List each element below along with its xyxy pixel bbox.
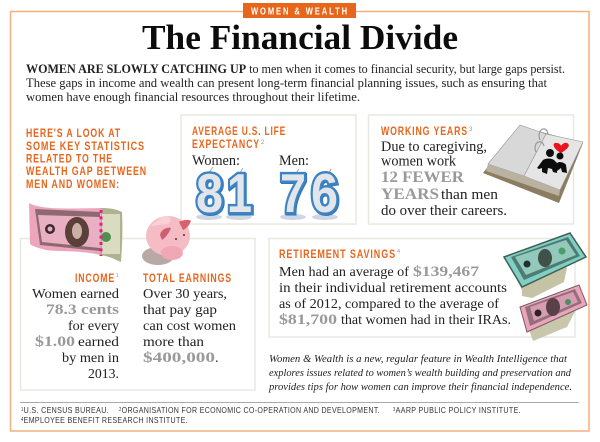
feature note: provides tips for how women can improve their financial independence. [268,381,572,393]
footnotes [20,402,579,425]
retirement text: $139,467 [413,264,480,280]
icon: stacks of green and pink money [504,233,587,341]
candles: 81 [196,162,252,224]
total earnings text: . [215,351,218,366]
total earnings column [143,271,236,366]
life expectancy heading: EXPECTANCY [192,137,260,151]
panel: working years [368,115,574,224]
candles: 81: 1 [227,162,252,224]
working years text: do over their careers. [381,203,507,219]
footnotes: 1 [21,407,24,413]
income text: $1.00 [35,334,75,350]
heart [554,143,569,153]
panel: income and total earnings [20,238,255,390]
intro paragraph: women have enough financial resources throughout their lifetime. [26,90,360,104]
income text [32,287,119,382]
section tag [243,3,356,18]
panel: life expectancy [181,115,356,224]
total earnings heading: TOTAL EARNINGS [143,271,232,285]
left intro heading [26,126,147,191]
footnotes: EMPLOYEE BENEFIT RESEARCH INSTITUTE. [24,415,188,425]
life expectancy heading: 2 [261,140,265,146]
candles: 76: 7 [280,162,306,224]
left intro heading: MEN AND WOMEN: [26,177,120,191]
income text: earned [78,335,119,350]
feature note: explores issues related to women’s wealth building and preservation and [269,367,571,379]
intro paragraph: WOMEN ARE SLOWLY CATCHING UP to men when it comes to financial security, but large gaps persist. [26,62,565,76]
income heading: INCOME [75,271,115,285]
intro paragraph [26,62,565,104]
left intro heading: HERE'S A LOOK AT [26,126,121,140]
candles: 81: 8 [196,162,223,224]
feature note: Women & Wealth is a new, regular feature in Wealth Intelligence that [269,353,568,365]
label: women: Women: [192,153,240,169]
label: men: Men: [279,153,309,169]
working years text: YEARS [381,186,439,203]
income column: 1 [116,273,119,279]
income text: 2013. [88,367,119,382]
total earnings text: can cost women [143,319,236,334]
working years text: than men [441,187,499,203]
section tag: WOMEN & WEALTH [251,6,349,18]
retirement text [279,264,511,328]
working years text: women work [381,154,457,170]
intro paragraph: These gaps in income and wealth can present long-term financial planning issues, such as ensuring that [26,76,548,90]
retirement heading: RETIREMENT SAVINGS [279,247,396,261]
income column [32,271,119,382]
life expectancy heading: AVERAGE U.S. LIFE [192,124,286,138]
total earnings text: more than [143,335,204,350]
footnotes: 2 [119,407,122,413]
total earnings text: $400,000 [143,350,215,366]
income text: for every [68,319,119,334]
total earnings text: that pay gap [143,303,217,318]
panel: retirement savings [269,238,575,337]
couple figure [537,149,567,174]
working years text [381,139,507,219]
icon: piggy bank [142,216,191,265]
panel: retirement savings: 4 [397,249,400,255]
perforated divider [100,210,102,256]
working years heading: WORKING YEARS [381,124,468,138]
left intro heading: RELATED TO THE [26,152,113,166]
total earnings text: Over 30 years, [143,287,227,302]
left intro heading: SOME KEY STATISTICS [26,139,145,153]
retirement text: Men had an average of [279,265,409,280]
income text: 78.3 cents [46,302,119,318]
working years text: Due to caregiving, [381,139,487,155]
candles: 76 [280,162,338,224]
icon: desk calendar [483,125,583,203]
footnotes: 3 [393,407,396,413]
retirement text: that women had in their IRAs. [341,313,511,328]
footnotes: ORGANISATION FOR ECONOMIC CO-OPERATION AND DEVELOPMENT. [122,405,380,415]
income text: by men in [62,351,119,366]
panel: working years: 3 [469,127,473,133]
retirement text: $81,700 [279,312,337,328]
feature note [268,353,572,393]
footnotes: U.S. CENSUS BUREAU. [24,405,109,415]
left intro heading: WEALTH GAP BETWEEN [26,164,147,178]
candles: 76: 6 [311,162,338,224]
footnotes: 4 [21,417,24,423]
icon: dollar bill, part pink [29,203,122,262]
retirement text: as of 2012, compared to the average of [279,297,499,312]
footnotes: AARP PUBLIC POLICY INSTITUTE. [396,405,521,415]
title: The Financial Divide [142,18,458,57]
retirement text: in their individual retirement accounts [279,281,507,296]
total earnings text [143,287,236,366]
life expectancy heading [192,124,286,151]
working years text: 12 FEWER [381,169,465,186]
income text: Women earned [32,287,119,302]
